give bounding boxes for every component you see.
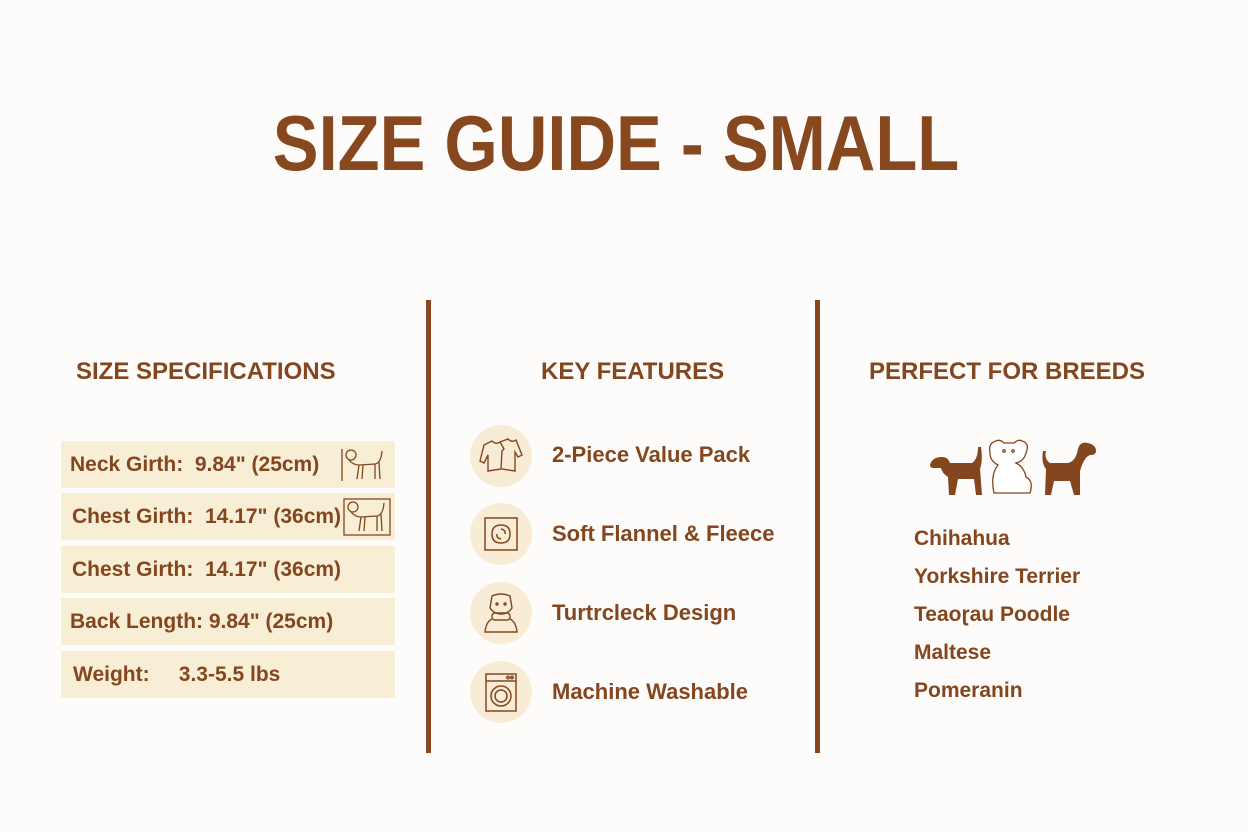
- icon: sweaters: [470, 425, 532, 487]
- text: breed list: Chihahua: [914, 527, 1010, 550]
- row: chest girth: Chest Girth: 14.17" (36cm): [72, 505, 341, 528]
- panel: breeds: [914, 440, 1096, 702]
- text: breed list: Yorkshire Terrier: [914, 565, 1080, 588]
- text: breed list: [914, 527, 1080, 702]
- row: back length: Back Length: 9.84" (25cm): [70, 610, 333, 633]
- feature: 2-piece value pack: [470, 425, 750, 487]
- row: neck girth: [61, 441, 395, 488]
- icon: dog in turtleneck: [470, 582, 532, 644]
- icon: dog chest measure: [343, 498, 391, 536]
- feature: soft flannel: Soft Flannel & Fleece: [552, 521, 774, 546]
- icon: washing machine: [470, 661, 532, 723]
- text: breed list: Pomeranin: [914, 679, 1023, 702]
- feature: soft flannel: [470, 503, 774, 565]
- feature: machine washable: [470, 661, 748, 723]
- feature: machine washable: Machine Washable: [552, 679, 748, 704]
- icon: three dogs: [930, 440, 1096, 495]
- text: breed list: Teaoɽau Poodle: [914, 603, 1070, 626]
- row: weight: [61, 651, 395, 698]
- icon: fabric swirl: [470, 503, 532, 565]
- row: chest girth: [61, 493, 395, 540]
- heading: perfect for breeds: PERFECT FOR BREEDS: [869, 358, 1145, 385]
- row: weight: Weight: 3.3-5.5 lbs: [73, 663, 280, 686]
- feature: 2-piece value pack: 2-Piece Value Pack: [552, 442, 750, 467]
- panel: key features: [470, 425, 774, 723]
- row: chest girth 2: [61, 546, 395, 593]
- panel: size specifications table: [61, 441, 395, 698]
- text: breed list: Maltese: [914, 641, 991, 664]
- feature: turtleneck: Turtrcleck Design: [552, 600, 736, 625]
- row: chest girth 2: Chest Girth: 14.17" (36cm): [72, 558, 341, 581]
- row: back length: [61, 598, 395, 645]
- row: neck girth: Neck Girth: 9.84" (25cm): [70, 453, 319, 476]
- heading: size specifications: SIZE SPECIFICATIONS: [76, 358, 336, 385]
- icon: dog neck measure: [341, 449, 383, 481]
- feature: turtleneck: [470, 582, 736, 644]
- heading: key features: KEY FEATURES: [541, 358, 724, 385]
- title: SIZE GUIDE - SMALL: [273, 99, 959, 187]
